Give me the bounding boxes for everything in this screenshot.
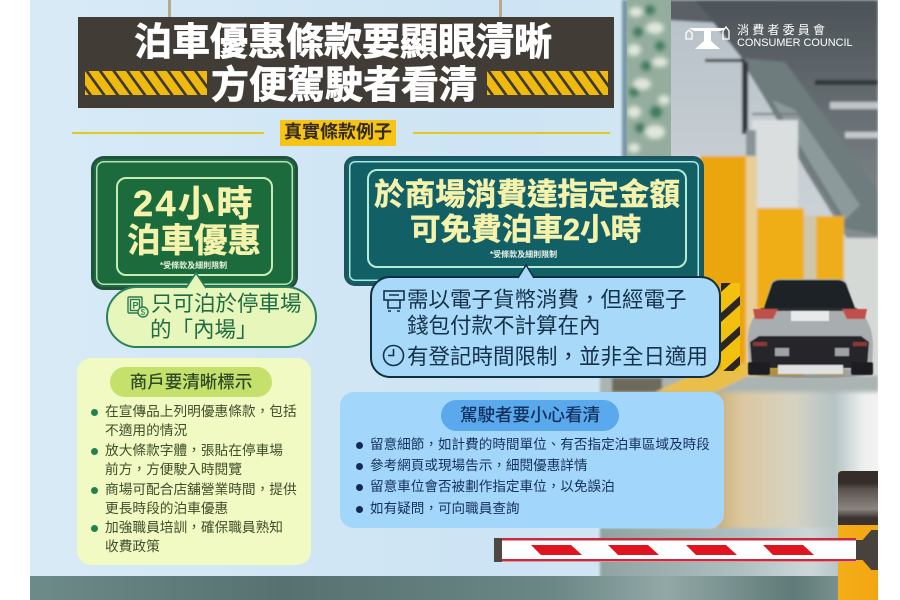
illustration: barrier gate — [494, 471, 878, 600]
item 3 line 2: 更長時段的泊車優惠 — [105, 501, 228, 516]
title panel — [78, 17, 614, 108]
item 1: 留意細節，如計費的時間單位、有否指定泊車區域及時段 — [370, 437, 710, 452]
green sign — [91, 156, 298, 290]
panel heading: 商戶要清晰標示 — [130, 372, 252, 392]
logo: Consumer Council — [685, 23, 853, 49]
sign text line 2: 可免費泊車2小時 — [410, 213, 641, 247]
teal sign — [344, 156, 704, 286]
bullet list — [356, 437, 710, 516]
icon: hanging ropes — [168, 0, 502, 18]
barrier post — [838, 471, 878, 600]
bubble text line 1: 只可泊於停車場 — [151, 292, 302, 316]
bubble text line 1: 需以電子貨幣消費，但經電子 — [407, 288, 687, 312]
section label: 真實條款例子 — [284, 122, 392, 142]
callout tail: blue — [518, 264, 534, 278]
item 4 line 1: 加強職員培訓，確保職員熟知 — [105, 520, 283, 535]
sign text line 2: 泊車優惠 — [127, 223, 261, 260]
sign inner frame — [116, 177, 273, 276]
barrier arm — [494, 538, 856, 562]
sign small print: *受條款及細則限制 — [160, 261, 227, 270]
logo Chinese name: 消費者委員會 — [737, 23, 828, 37]
icon: parking fee: P — [132, 300, 139, 310]
bullet 3 — [356, 484, 363, 491]
ground strip — [30, 576, 878, 600]
icon: parking fee — [127, 296, 149, 318]
sign text line 1: 於商場消費達指定金額 — [374, 178, 680, 212]
panel: drivers — [340, 392, 724, 528]
bullet 2 — [91, 448, 98, 455]
item 3 line 1: 商場可配合店舖營業時間，提供 — [105, 482, 297, 497]
bubble text line 2: 的「內場」 — [150, 318, 258, 342]
callout tail: green — [186, 272, 206, 288]
callout: blue bubble — [370, 276, 721, 378]
hazard stripe right — [487, 71, 608, 95]
icon: parking fee: $ — [141, 308, 146, 317]
bullet 1 — [91, 409, 98, 416]
panel heading — [441, 400, 619, 431]
panel heading — [110, 367, 272, 397]
ceiling — [650, 0, 878, 30]
item 4 line 2: 收費政策 — [105, 539, 160, 554]
sign inner frame — [367, 169, 687, 268]
divider left — [72, 132, 264, 134]
bubble text line 2: 錢包付款不計算在內 — [407, 314, 601, 338]
bullet 3 — [91, 487, 98, 494]
item 4: 如有疑問，可向職員查詢 — [370, 501, 520, 516]
bullet 1 — [356, 442, 363, 449]
bullet 4 — [91, 525, 98, 532]
sign small print: *受條款及細則限制 — [490, 250, 557, 259]
bubble text line 3: 有登記時間限制，並非全日適用 — [407, 345, 708, 369]
item 1 line 1: 在宣傳品上列明優惠條款，包括 — [105, 404, 297, 419]
item 1 line 2: 不適用的情況 — [105, 423, 187, 438]
title line 2: 方便駕駛者看清 — [211, 65, 477, 107]
panel: merchants — [77, 358, 311, 565]
logo English name: CONSUMER COUNCIL — [737, 37, 853, 49]
trees — [627, 0, 671, 156]
floor — [600, 376, 878, 396]
bullet 4 — [356, 506, 363, 513]
sign text line 1: 24小時 — [133, 183, 255, 224]
icon: shop — [383, 290, 405, 312]
item 2: 參考網頁或現場告示，細閱優惠詳情 — [370, 458, 588, 473]
icon: hazard column — [721, 283, 740, 371]
panel heading: 駕駛者要小心看清 — [460, 405, 600, 425]
icon: clock — [382, 344, 404, 366]
arm mount — [856, 530, 878, 570]
icon: scales — [685, 26, 730, 49]
orange pillars — [628, 156, 700, 376]
callout: green bubble — [106, 286, 317, 348]
post cap — [838, 471, 878, 525]
item 2 line 1: 放大條款字體，張貼在停車場 — [105, 443, 283, 458]
hazard stripe left — [85, 71, 207, 95]
item 3: 留意車位會否被劃作指定車位，以免誤泊 — [370, 479, 615, 494]
illustration: car rear — [747, 278, 874, 378]
title line 1: 泊車優惠條款要顯眼清晰 — [134, 22, 552, 64]
bullet 2 — [356, 463, 363, 470]
bullet list — [91, 404, 297, 554]
divider right — [413, 132, 610, 134]
item 2 line 2: 前方，方便駛入時閱覽 — [105, 462, 242, 477]
wall — [665, 20, 878, 390]
